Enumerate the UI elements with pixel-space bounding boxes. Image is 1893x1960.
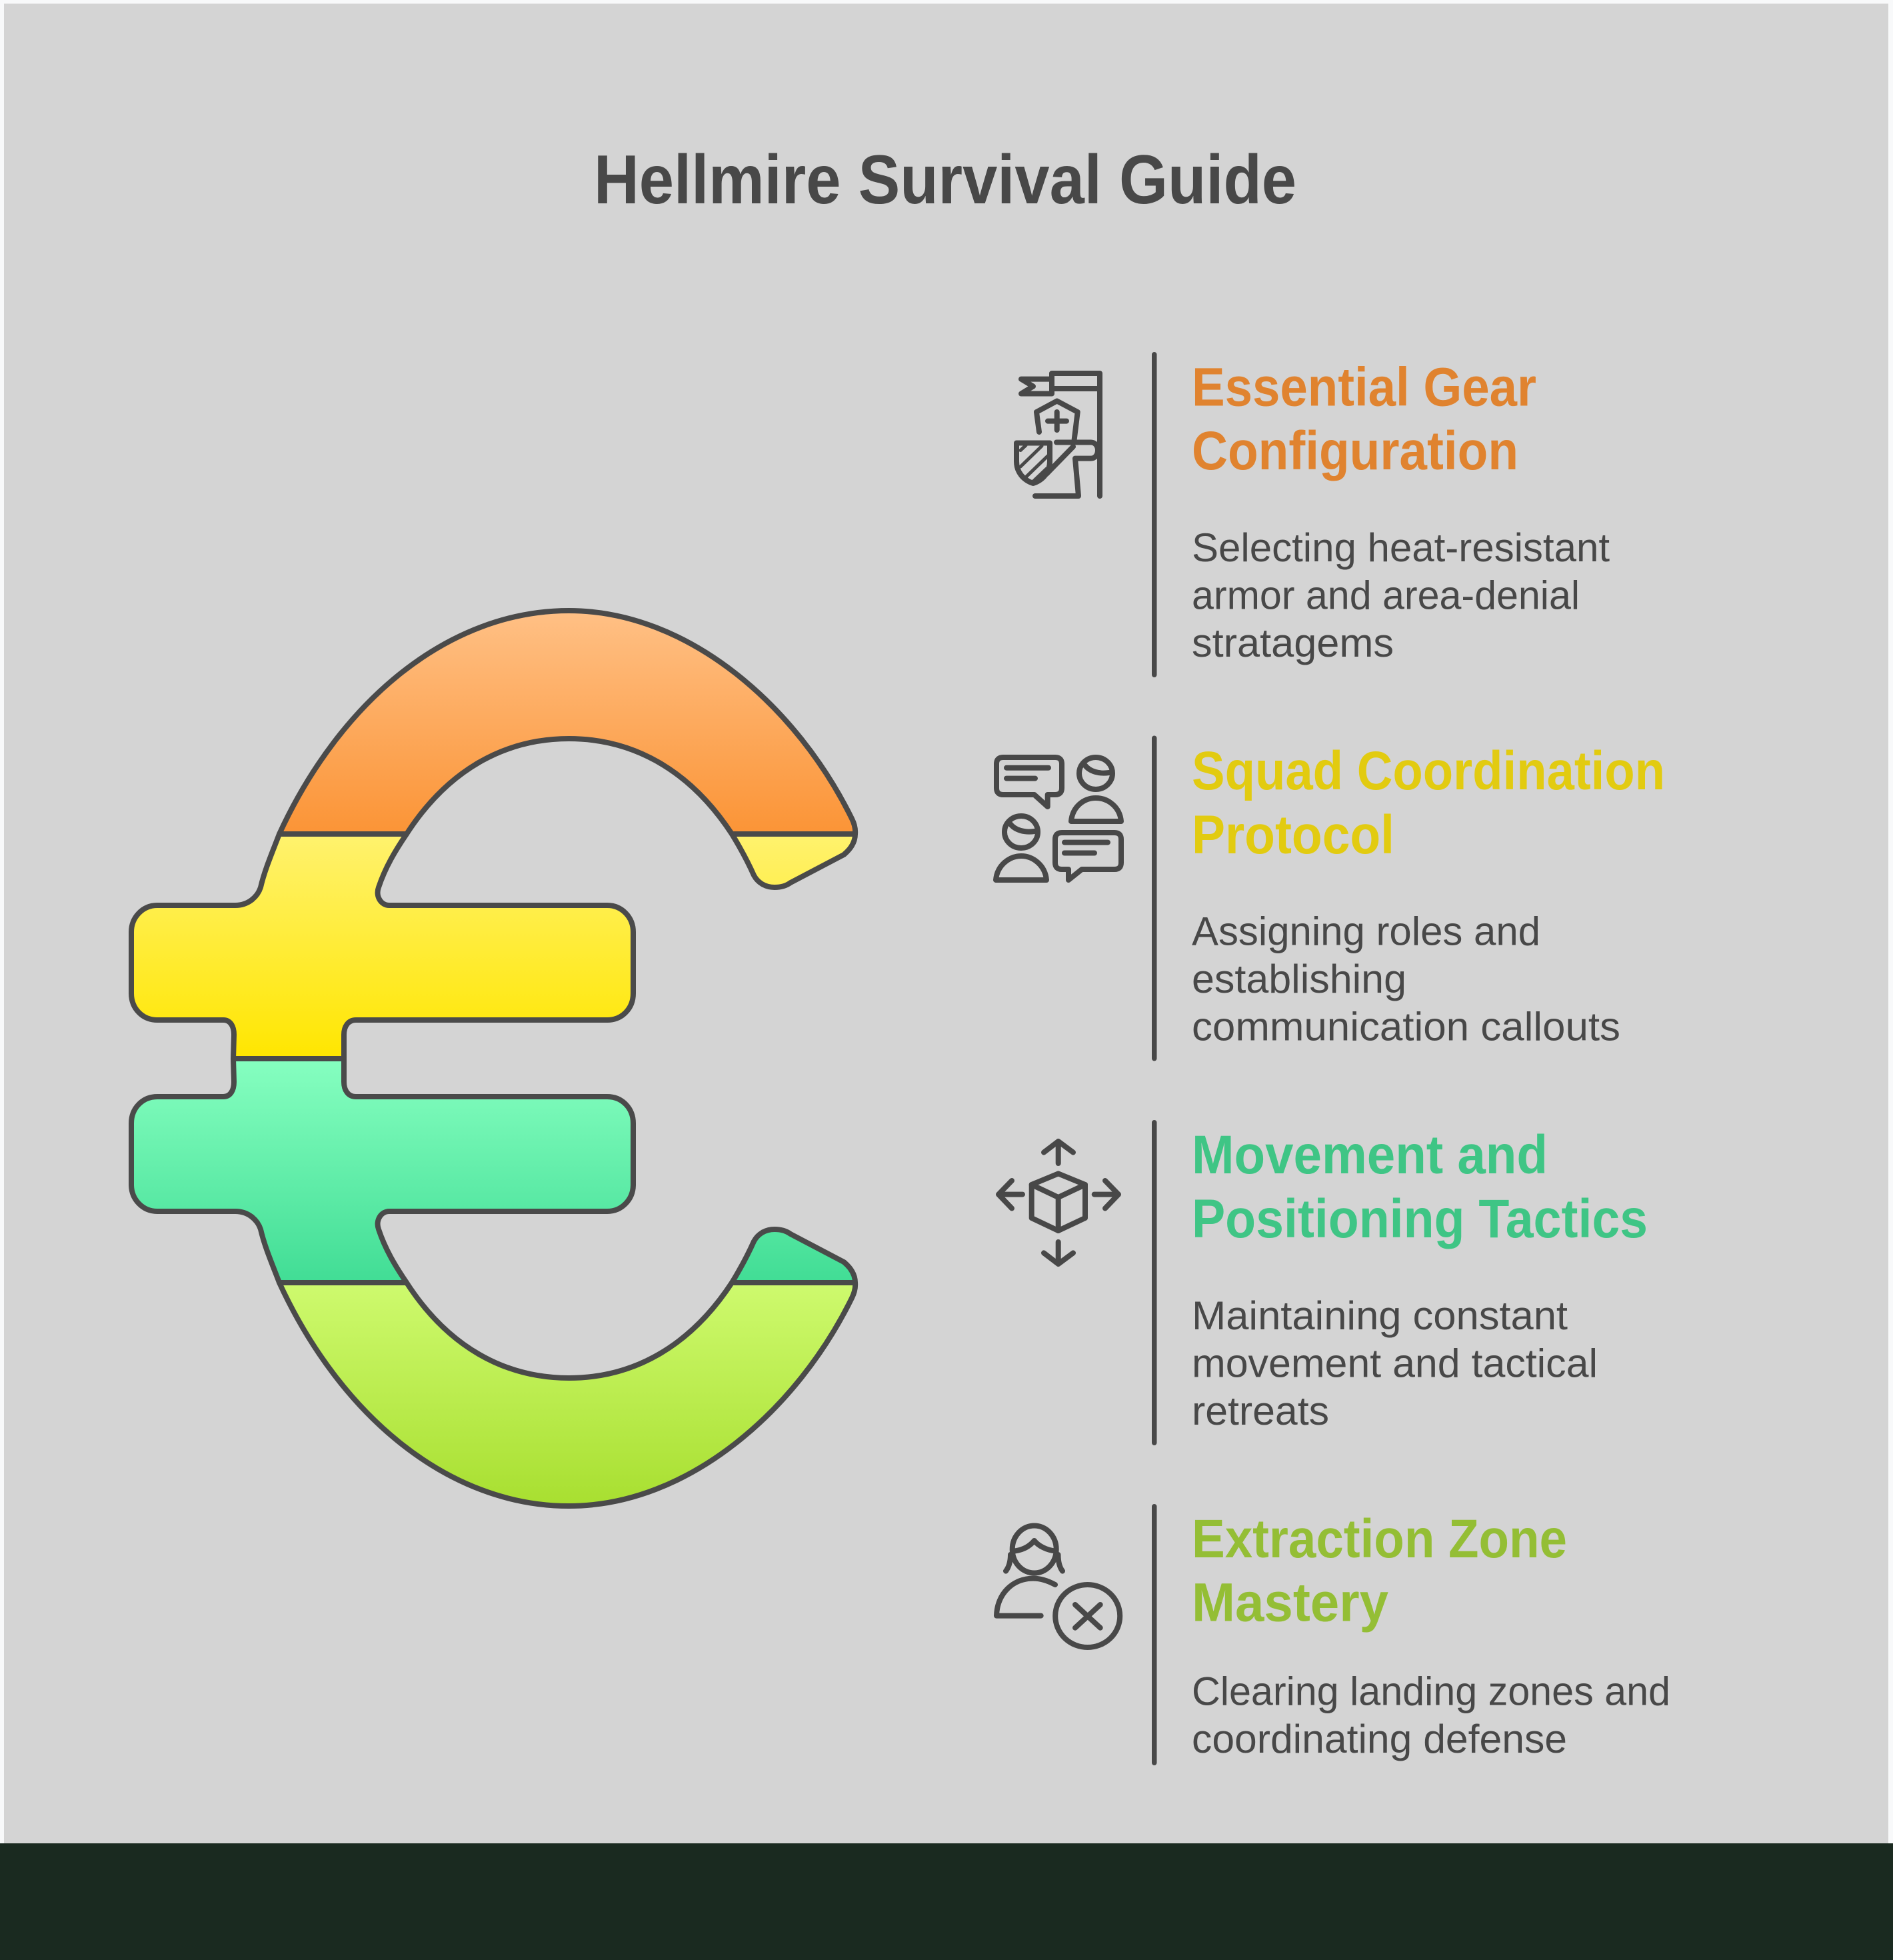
heading: Extraction Zone	[1192, 1509, 1567, 1569]
item: essential gear	[1016, 352, 1610, 677]
heading: Essential Gear	[1192, 357, 1536, 417]
heading: Protocol	[1192, 805, 1394, 865]
divider bar	[1152, 352, 1157, 677]
heading	[1192, 1125, 1648, 1249]
body text: Clearing landing zones and	[1192, 1669, 1670, 1714]
body text	[1192, 525, 1610, 665]
icon: people with speech bubbles	[996, 757, 1121, 880]
title: Hellmire Survival Guide	[594, 141, 1296, 219]
item: squad coordination	[996, 736, 1665, 1061]
body text: stratagems	[1192, 621, 1394, 665]
body text: communication callouts	[1192, 1004, 1620, 1049]
segment: lime arch	[279, 1283, 855, 1506]
heading: Movement and	[1192, 1125, 1548, 1185]
heading: Squad Coordination	[1192, 741, 1665, 801]
divider bar	[1152, 1120, 1157, 1445]
body text: movement and tactical	[1192, 1341, 1598, 1385]
body text: establishing	[1192, 957, 1406, 1001]
body text: armor and area-denial	[1192, 573, 1580, 617]
body text: coordinating defense	[1192, 1717, 1567, 1761]
body text	[1192, 1293, 1598, 1433]
segment: yellow upper bar	[131, 834, 855, 1059]
item: movement and positioning	[998, 1120, 1648, 1445]
icon: cube with four arrows	[998, 1141, 1118, 1264]
icon: person with x mark	[996, 1525, 1120, 1647]
heading	[1192, 1509, 1567, 1633]
body text	[1192, 1669, 1670, 1761]
divider bar	[1152, 1504, 1157, 1765]
divider bar	[1152, 736, 1157, 1061]
heading: Positioning Tactics	[1192, 1189, 1648, 1249]
body text: Maintaining constant	[1192, 1293, 1568, 1338]
segment: mint lower bar	[131, 1059, 855, 1283]
segment: orange arch	[279, 611, 855, 834]
body text	[1192, 909, 1620, 1049]
heading	[1192, 741, 1665, 865]
icon: medic shield and flag	[1016, 373, 1100, 496]
body text: retreats	[1192, 1389, 1329, 1433]
body text: Selecting heat-resistant	[1192, 525, 1610, 570]
heading: Configuration	[1192, 421, 1518, 481]
euro symbol chart	[131, 611, 855, 1506]
heading: Mastery	[1192, 1573, 1388, 1633]
item: extraction zone	[996, 1504, 1670, 1765]
heading	[1192, 357, 1536, 481]
footer band	[0, 1843, 1893, 1960]
body text: Assigning roles and	[1192, 909, 1540, 953]
